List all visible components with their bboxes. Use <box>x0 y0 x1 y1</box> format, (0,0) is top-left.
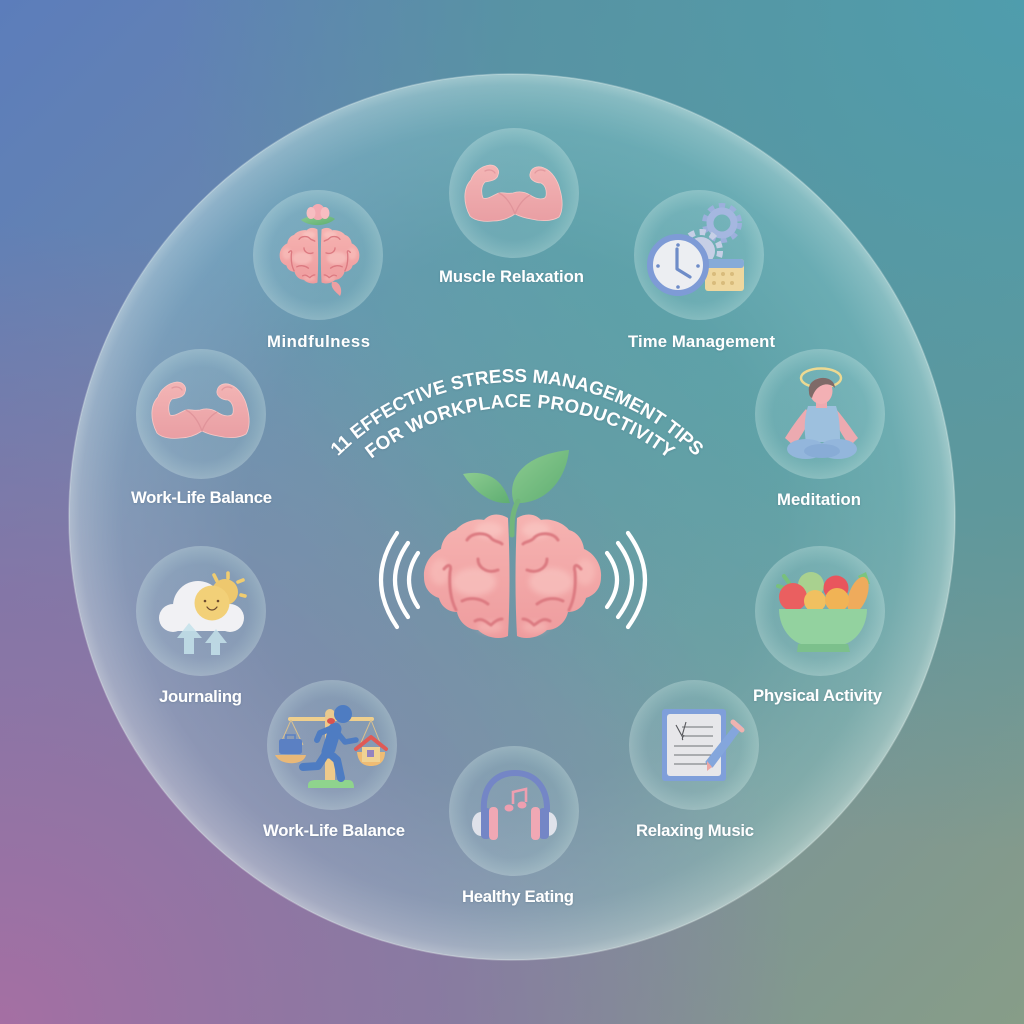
sound waves left <box>381 533 418 627</box>
label: Work-Life Balance <box>131 488 272 507</box>
bubble <box>629 680 759 810</box>
tip: Meditation <box>755 349 885 509</box>
label: Mindfulness <box>267 332 370 351</box>
bubble <box>267 680 397 810</box>
icon: clock, gears, calendar <box>650 206 744 293</box>
label: Physical Activity <box>753 686 883 705</box>
bubble <box>634 190 764 320</box>
bubble <box>253 190 383 320</box>
label: Meditation <box>777 490 861 509</box>
tip: Healthy Eating <box>449 746 579 906</box>
tip: Mindfulness <box>253 190 383 351</box>
icon: headphones and note <box>472 773 557 840</box>
panel: large glass circle <box>69 74 955 960</box>
sound waves right <box>607 533 645 627</box>
label: Relaxing Music <box>636 821 754 840</box>
sprout <box>463 450 569 535</box>
bubble <box>449 746 579 876</box>
icon: notepad and pencil <box>662 709 742 781</box>
icon: cloud, sun and arrows <box>159 573 245 655</box>
bubble <box>755 546 885 676</box>
label: Healthy Eating <box>462 887 574 906</box>
tip: Time Management <box>628 190 775 351</box>
central icon: brain with sprout and sound waves <box>381 450 645 638</box>
tip: Muscle Relaxation <box>439 128 584 286</box>
label: Muscle Relaxation <box>439 267 584 286</box>
tip: Relaxing Music <box>629 680 759 840</box>
icon: brain with lotus <box>280 204 359 296</box>
icon: flexed arms <box>465 165 562 221</box>
tip: Physical Activity <box>753 546 885 705</box>
tip: Work-Life Balance (scale) <box>263 680 405 840</box>
icon: runner on balance scale <box>275 705 386 788</box>
title: curved heading <box>331 368 703 458</box>
icon: meditating person <box>785 368 858 459</box>
tip: Journaling <box>136 546 266 706</box>
label: Work-Life Balance <box>263 821 405 840</box>
brain <box>424 514 601 638</box>
bubble <box>136 349 266 479</box>
label: Time Management <box>628 332 775 351</box>
bubble <box>449 128 579 258</box>
bubble <box>755 349 885 479</box>
icon: flexed arms <box>152 382 249 438</box>
label: Journaling <box>159 687 242 706</box>
bubble <box>136 546 266 676</box>
tip: Work-Life Balance (arms) <box>131 349 272 507</box>
title line 1: 11 EFFECTIVE STRESS MANAGEMENT TIPS <box>331 368 703 456</box>
title line 2: FOR WORKPLACE PRODUCTIVITY <box>364 394 676 458</box>
icon: bowl of fruit <box>778 572 873 652</box>
